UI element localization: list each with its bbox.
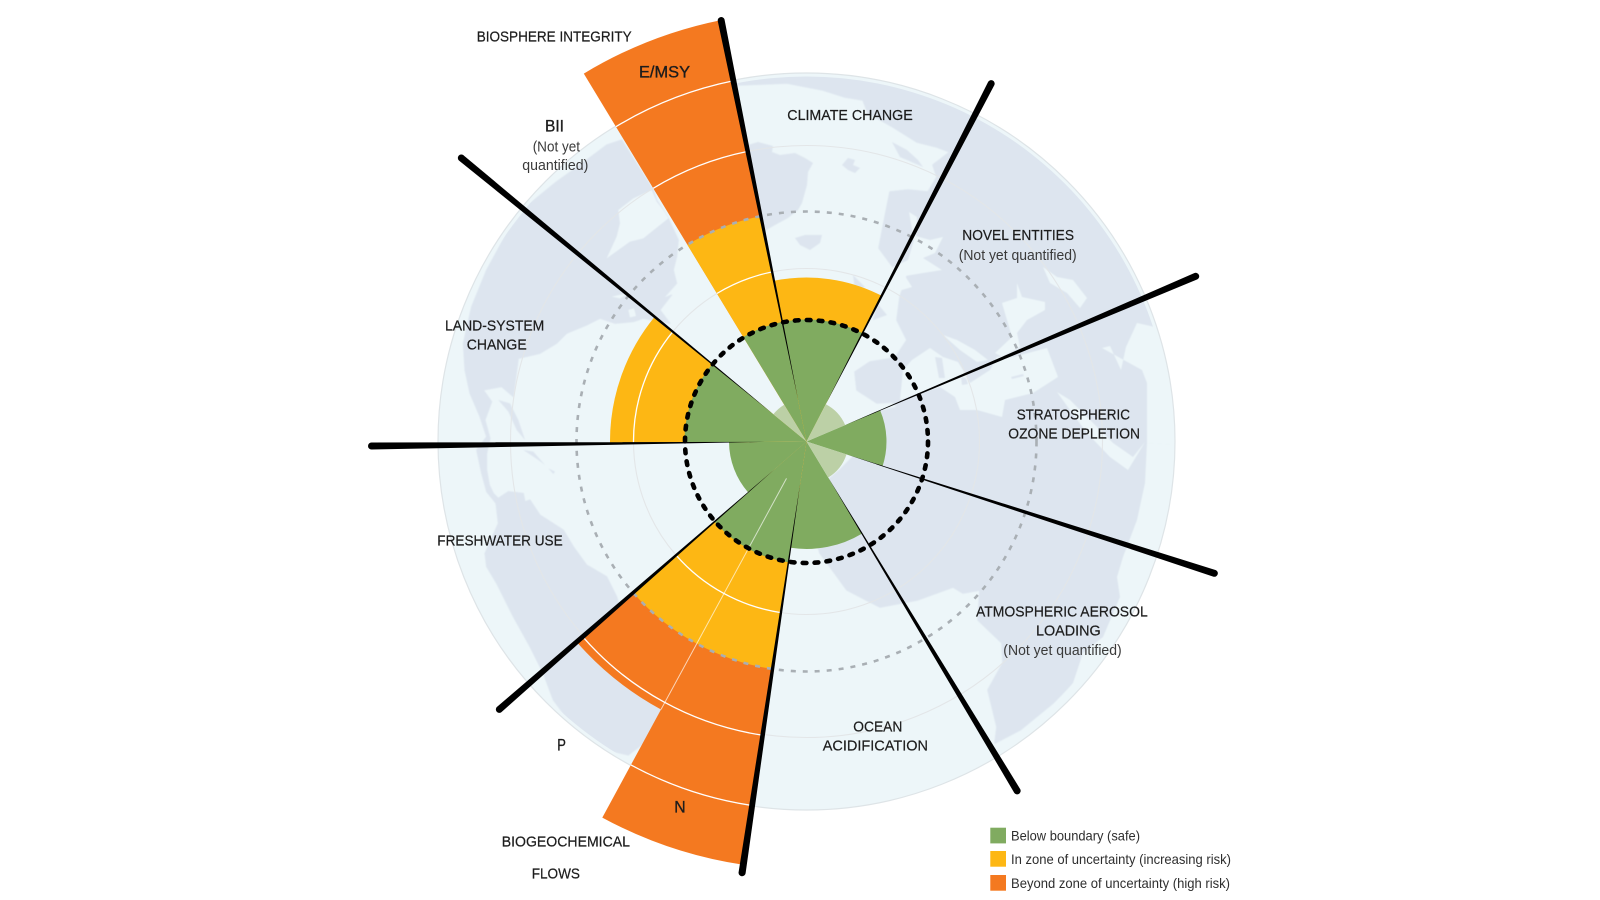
not yet quantified inner wedges <box>773 404 846 478</box>
wedge: freshwater use <box>729 442 806 492</box>
label: BII not yet quantified: quantified) <box>522 158 588 174</box>
label: N: N <box>674 798 686 817</box>
label: novel entities: NOVEL ENTITIES <box>962 227 1074 244</box>
label: novel entities: (Not yet quantified) <box>959 248 1077 264</box>
legend item: uncertainty: In zone of uncertainty (increasing risk) <box>1011 851 1231 867</box>
wedge: land-system change <box>610 317 806 444</box>
label: stratospheric ozone depletion: STRATOSPHERIC <box>1017 406 1130 423</box>
wedge: ocean acidification <box>791 442 862 549</box>
label: E/MSY: E/MSY <box>639 62 690 81</box>
wedge: biogeochemical flows N and P <box>577 442 806 865</box>
label: atmospheric aerosol loading: ATMOSPHERIC AEROSOL <box>976 604 1148 621</box>
label: land-system change: LAND-SYSTEM <box>445 318 544 335</box>
label: BII not yet quantified: (Not yet <box>533 140 580 156</box>
label: stratospheric ozone depletion <box>1008 406 1140 443</box>
label: biosphere integrity: BIOSPHERE INTEGRITY <box>477 29 632 46</box>
label: novel entities <box>959 227 1077 264</box>
label: ocean acidification <box>823 719 928 755</box>
legend item: safe: Below boundary (safe) <box>1011 828 1140 844</box>
label: ocean acidification: OCEAN <box>853 719 902 736</box>
label: stratospheric ozone depletion: OZONE DEPLETION <box>1008 426 1140 443</box>
label: ocean acidification: ACIDIFICATION <box>823 738 928 755</box>
label: atmospheric aerosol loading: LOADING <box>1036 623 1101 640</box>
label: BII not yet quantified: BII <box>545 117 564 136</box>
label: land-system change: CHANGE <box>467 336 527 353</box>
label: biogeochemical flows <box>502 834 630 883</box>
label: land-system change <box>445 318 544 353</box>
legend item: high risk: Beyond zone of uncertainty (high risk) <box>1011 875 1230 891</box>
zone of uncertainty outer dotted circle <box>576 212 1036 672</box>
spokes separating the boundaries <box>368 17 1218 876</box>
legend <box>990 828 1231 891</box>
label: climate change: CLIMATE CHANGE <box>787 107 913 124</box>
label: freshwater use: FRESHWATER USE <box>437 533 563 550</box>
label: BII not yet quantified <box>522 117 588 174</box>
label: atmospheric aerosol loading <box>976 604 1148 659</box>
wedge: climate change <box>774 278 882 442</box>
label: biogeochemical flows: FLOWS <box>532 866 580 883</box>
label: biogeochemical flows: BIOGEOCHEMICAL <box>502 834 630 851</box>
label: P: P <box>557 736 566 755</box>
label: atmospheric aerosol loading: (Not yet quantified) <box>1003 643 1122 659</box>
globe background <box>438 65 1180 810</box>
safe boundary dashed circle <box>685 320 928 563</box>
wedge: stratospheric ozone <box>806 410 886 466</box>
wedge: biosphere integrity E/MSY <box>584 20 806 441</box>
